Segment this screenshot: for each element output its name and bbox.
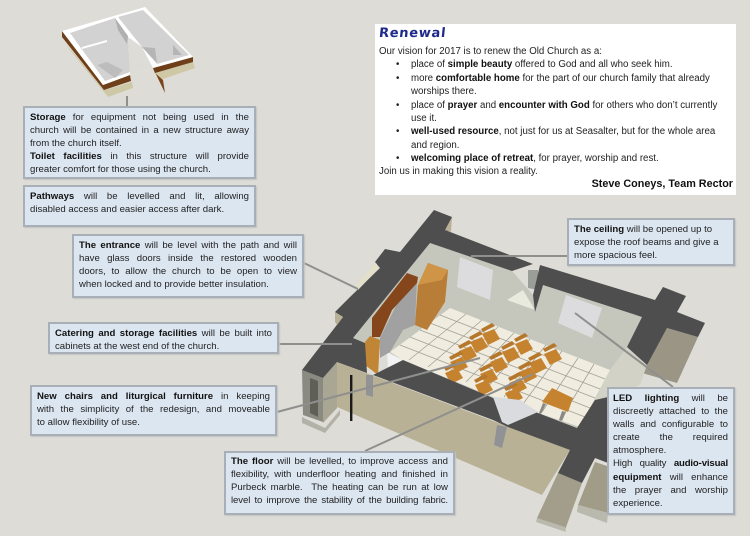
- callout: floor: [224, 451, 455, 515]
- callout: ceiling: expose the roof beams and give a: [574, 237, 719, 248]
- panel: renewal vision statement: use it.: [411, 113, 437, 124]
- callout: chairs: [30, 385, 277, 436]
- callout: ceiling: The ceiling will be opened up to: [574, 224, 712, 235]
- callout: pathways: [23, 185, 256, 227]
- dark wall tops: [302, 210, 705, 483]
- callout: storage and toilets: from the church itself.: [30, 138, 122, 149]
- callout: lighting and audio-visual: [607, 387, 735, 515]
- callout: lighting and audio-visual: the prayer and worship: [613, 485, 728, 496]
- cabinets: [365, 263, 448, 375]
- callout: storage and toilets: Storage for equipment not being used in the: [30, 112, 249, 123]
- south stone wall face: [337, 362, 570, 495]
- callout: floor: flexibility, with underfloor heating and finished in: [231, 469, 448, 480]
- glass screen and arch: [380, 280, 417, 358]
- callout: lighting and audio-visual: High quality audio-visual: [613, 458, 728, 469]
- panel: renewal vision statement: welcoming place of retreat, for prayer, worship and rest.: [411, 153, 659, 164]
- callout: entrance: [72, 234, 304, 298]
- callout: lighting and audio-visual: LED lighting will be: [613, 393, 728, 404]
- callout: lighting and audio-visual: experience.: [613, 498, 663, 509]
- callout: floor: Purbeck marble. The heating can be run at low: [231, 482, 448, 493]
- callout: entrance: have glass doors inside the restored wooden: [79, 253, 297, 264]
- panel: renewal vision statement: •: [396, 73, 399, 84]
- panel: renewal vision statement: and region.: [411, 140, 459, 151]
- callout: chairs: New chairs and liturgical furniture in keeping: [37, 391, 270, 402]
- interior stone walls and floor margin: [353, 243, 642, 428]
- callout: catering: cabinets at the west end of the church.: [55, 341, 219, 352]
- tiled floor: [390, 308, 610, 427]
- panel: renewal vision statement: [375, 24, 736, 195]
- panel: renewal vision statement: place of simple beauty offered to God and all who seek him.: [411, 59, 673, 70]
- corner stone pier: [302, 362, 340, 433]
- callout: storage and toilets: Toilet facilities in this structure will provide: [30, 151, 249, 162]
- callout: pathways: Pathways will be levelled and lit, allowing: [30, 191, 249, 202]
- callout: storage and toilets: greater comfort for those using the church.: [30, 164, 211, 175]
- callout: lighting and audio-visual: discreetly attached to the: [613, 406, 728, 417]
- church building model: [302, 210, 705, 532]
- panel: renewal vision statement: •: [396, 126, 399, 137]
- wall panels: [457, 257, 493, 300]
- callout: lighting and audio-visual: equipment will enhance: [613, 472, 728, 483]
- callout: entrance: The entrance will be level with the path and will: [79, 240, 297, 251]
- chairs: [444, 323, 573, 421]
- panel: renewal vision statement: Join us in making this vision a reality.: [379, 166, 538, 177]
- heading: Renewal: Renewal: [378, 26, 447, 41]
- callout: lighting and audio-visual: walls and configurable to: [613, 419, 728, 430]
- callout: catering: Catering and storage facilities will be built into: [55, 328, 272, 339]
- callout: chairs: to allow flexibility of use.: [37, 417, 140, 428]
- panel: renewal vision statement: •: [396, 100, 399, 111]
- leader lines: [127, 96, 673, 451]
- small storage and toilet building model: [62, 7, 195, 97]
- callout: catering: [48, 322, 279, 354]
- callout: entrance: when locked and to provide better insulation.: [79, 279, 269, 290]
- callout: storage and toilets: [23, 106, 256, 179]
- signature: Steve Coneys, Team Rector: [592, 178, 733, 190]
- panel: renewal vision statement: •: [396, 153, 399, 164]
- callout: lighting and audio-visual: create the required: [613, 432, 728, 443]
- white entry wedge: [387, 352, 403, 368]
- callout: storage and toilets: church will be contained in a new structure away: [30, 125, 249, 136]
- callout: floor: The floor will be levelled, to improve access and: [231, 456, 448, 467]
- callout: lighting and audio-visual: atmosphere.: [613, 445, 666, 456]
- callout: chairs: with the simplicity of the redesign, and moveable: [37, 404, 270, 415]
- callout: floor: level to improve the stability of the building fabric.: [231, 495, 448, 506]
- east stone faces: [642, 328, 698, 383]
- black vertical post: [350, 375, 352, 421]
- panel: renewal vision statement: place of prayer and encounter with God for others who don’t currently: [411, 100, 717, 111]
- stone details on wall ends: [357, 263, 379, 290]
- callout: ceiling: [567, 218, 735, 266]
- callout: ceiling: more spacious feel.: [574, 250, 657, 261]
- panel: renewal vision statement: •: [396, 59, 399, 70]
- callout: pathways: disabled access and easier access after dark.: [30, 204, 224, 215]
- callout: entrance: doors, to allow the church to be open to view: [79, 266, 297, 277]
- panel: renewal vision statement: well-used resource, not just for us at Seasalter, but for the whole area: [411, 126, 715, 137]
- south door with light funnel: [493, 397, 538, 425]
- panel: renewal vision statement: more comfortable home for the part of our church family that already: [411, 73, 710, 84]
- panel: renewal vision statement: Our vision for 2017 is to renew the Old Church as a:: [379, 46, 602, 57]
- panel: renewal vision statement: worships there.: [411, 86, 477, 97]
